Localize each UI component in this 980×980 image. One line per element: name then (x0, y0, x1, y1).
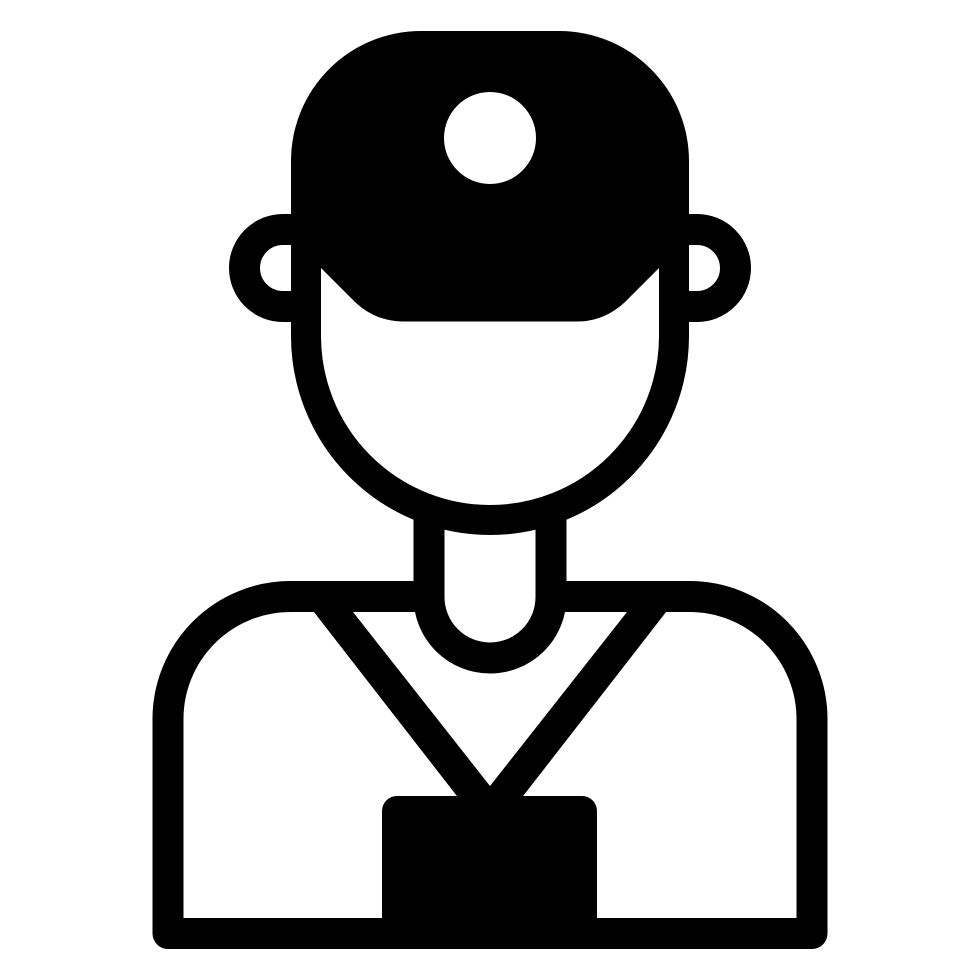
cap (291, 31, 689, 322)
left ear (244, 230, 295, 306)
neck (429, 510, 551, 658)
torso outline (168, 596, 812, 934)
cap badge (444, 92, 536, 184)
ID badge (382, 796, 597, 934)
lanyard (308, 605, 672, 800)
face outline (306, 200, 674, 520)
right ear (685, 230, 735, 306)
